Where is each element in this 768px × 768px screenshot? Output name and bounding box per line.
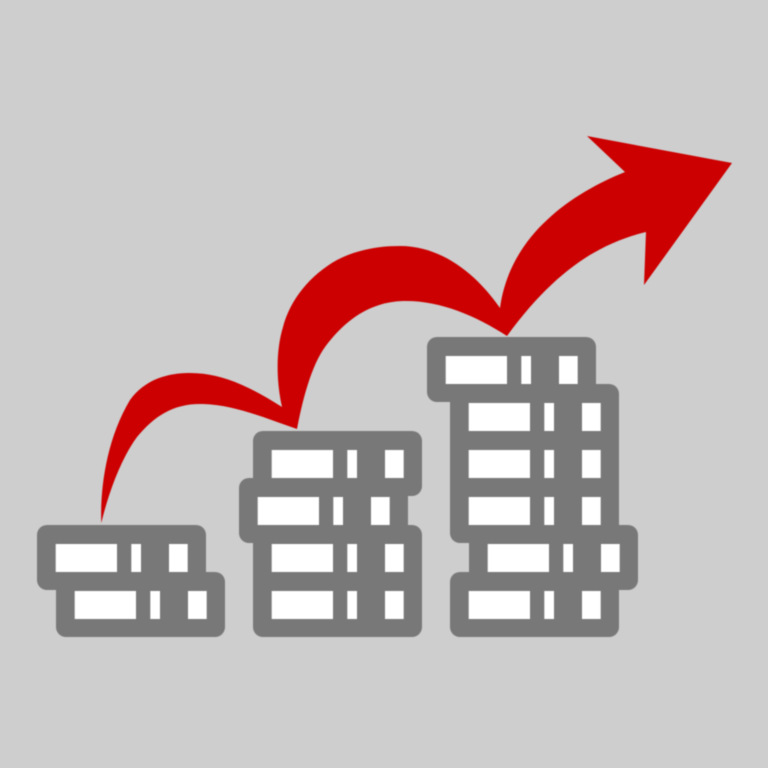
stack 3: six coins [427,337,638,637]
arrow: red bouncing growth arrow [101,136,732,523]
stack 2: four coins [239,431,422,637]
stack 1: two coins [37,525,225,637]
